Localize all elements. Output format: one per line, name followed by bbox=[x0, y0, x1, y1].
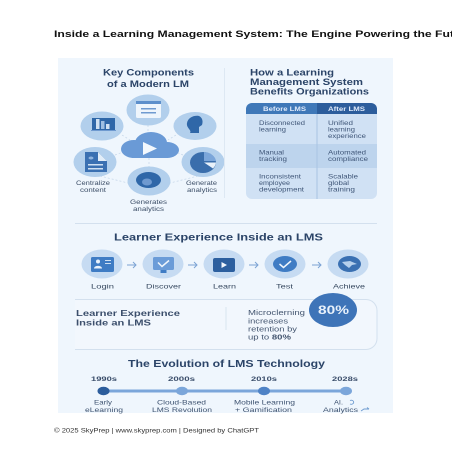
label: centralize content: Centralize bbox=[76, 180, 110, 187]
label: generates analytics bottom: analytics bbox=[133, 206, 165, 213]
step: learn bbox=[204, 250, 244, 278]
table header: Before LMS bbox=[263, 106, 307, 113]
label: centralize content: content bbox=[80, 187, 106, 194]
stat badge bbox=[309, 293, 357, 327]
table cells: learning bbox=[259, 127, 287, 134]
table cells: learning bbox=[328, 126, 356, 134]
panel: benefits bbox=[246, 68, 377, 199]
callout text: increases bbox=[248, 318, 289, 325]
step labels: Login bbox=[91, 284, 115, 291]
heading: benefits: How a Learning bbox=[250, 68, 334, 78]
timeline labels: Early bbox=[94, 400, 113, 407]
table cells: compliance bbox=[328, 156, 369, 163]
callout text: Microclerning bbox=[248, 310, 305, 317]
timeline labels: Analytics bbox=[323, 407, 359, 414]
step: discover bbox=[142, 250, 184, 278]
heading: learner experience: Learner Experience Inside an LMS bbox=[114, 232, 323, 244]
callout heading: Inside an LMS bbox=[76, 318, 151, 328]
table bbox=[246, 103, 377, 199]
panel: key components bbox=[74, 68, 224, 213]
step: test bbox=[264, 250, 306, 278]
table header: After LMS bbox=[328, 106, 366, 113]
arrow bbox=[312, 262, 321, 268]
callout text: up to 80% bbox=[248, 334, 292, 342]
icon: top window bbox=[126, 94, 170, 126]
divider bbox=[224, 68, 225, 198]
title: Inside a Learning Management System: The Engine Powering the Fut bbox=[54, 29, 452, 40]
table cells: employee bbox=[259, 180, 291, 187]
timeline bbox=[85, 376, 369, 414]
callout heading: Learner Experience bbox=[76, 308, 180, 318]
heading: key components: of a Modern LM bbox=[107, 79, 189, 90]
table cells: Unified bbox=[328, 120, 354, 127]
table cells: global bbox=[328, 180, 349, 187]
timeline labels: LMS Revolution bbox=[152, 407, 212, 414]
connector lines bbox=[100, 125, 198, 183]
panel: infographic background bbox=[58, 58, 393, 413]
timeline labels bbox=[85, 400, 359, 414]
icon: small analytics arrows bbox=[350, 400, 369, 411]
step: login bbox=[82, 250, 122, 278]
step: achieve bbox=[328, 250, 368, 278]
callout heading bbox=[76, 308, 180, 328]
table cells: Automated bbox=[328, 149, 367, 156]
table cells: tracking bbox=[259, 156, 288, 163]
table cells: training bbox=[328, 187, 356, 194]
icon: donut bbox=[128, 166, 170, 196]
arrow bbox=[249, 262, 258, 268]
label: generate analytics right: analytics bbox=[187, 187, 218, 194]
timeline labels: AI. bbox=[334, 400, 343, 407]
callout text: retention by bbox=[248, 327, 298, 334]
step labels: Test bbox=[276, 284, 293, 291]
step labels: Discover bbox=[146, 284, 182, 291]
table cells: development bbox=[259, 187, 304, 194]
table cells: experience bbox=[328, 133, 367, 140]
heading: benefits bbox=[250, 68, 369, 96]
footer: © 2025 SkyPrep | www.skyprep.com | Designed by ChatGPT bbox=[54, 428, 259, 435]
step labels: Learn bbox=[213, 284, 237, 291]
divider bbox=[75, 223, 377, 224]
table cells: Scalable bbox=[328, 173, 359, 180]
years: 2010s bbox=[251, 376, 278, 383]
years: 2000s bbox=[168, 376, 196, 383]
stat badge: 80% bbox=[318, 305, 349, 317]
step labels: Achieve bbox=[333, 284, 366, 291]
table cells: Inconsistent bbox=[259, 173, 301, 180]
icon: central cloud play bbox=[121, 132, 179, 158]
callout text bbox=[248, 310, 305, 342]
table cells: Disconnected bbox=[259, 120, 306, 127]
icon: pie chart bbox=[182, 147, 224, 177]
table cells: Manual bbox=[259, 149, 284, 156]
timeline labels: eLearning bbox=[85, 407, 123, 414]
icon: head profile bbox=[174, 112, 216, 140]
years: 1990s bbox=[91, 376, 118, 383]
heading: key components bbox=[103, 68, 194, 90]
label: centralize content bbox=[76, 180, 110, 194]
heading: evolution: The Evolution of LMS Technology bbox=[128, 359, 326, 370]
timeline labels: Cloud-Based bbox=[157, 400, 207, 407]
label: generate analytics right: Generate bbox=[186, 180, 217, 187]
icon: bar chart bbox=[80, 112, 124, 140]
arrow bbox=[188, 262, 197, 268]
label: generates analytics bottom bbox=[130, 199, 168, 213]
heading: benefits: Management System bbox=[250, 77, 363, 87]
years: 2028s bbox=[332, 376, 359, 383]
timeline line and nodes bbox=[98, 387, 352, 395]
callout panel bbox=[75, 293, 377, 350]
timeline labels: Mobile Learning bbox=[234, 400, 295, 407]
label: generates analytics bottom: Generates bbox=[130, 199, 168, 206]
step labels bbox=[91, 284, 366, 291]
table header bbox=[263, 106, 366, 113]
icon: document bbox=[74, 147, 116, 177]
process flow bbox=[82, 250, 368, 291]
timeline labels: + Gamification bbox=[235, 407, 293, 414]
years bbox=[91, 376, 359, 383]
heading: key components: Key Components bbox=[103, 68, 194, 78]
heading: benefits: Benefits Organizations bbox=[250, 86, 369, 96]
arrow bbox=[127, 262, 136, 268]
table cells bbox=[259, 120, 369, 194]
label: generate analytics right bbox=[186, 180, 218, 194]
